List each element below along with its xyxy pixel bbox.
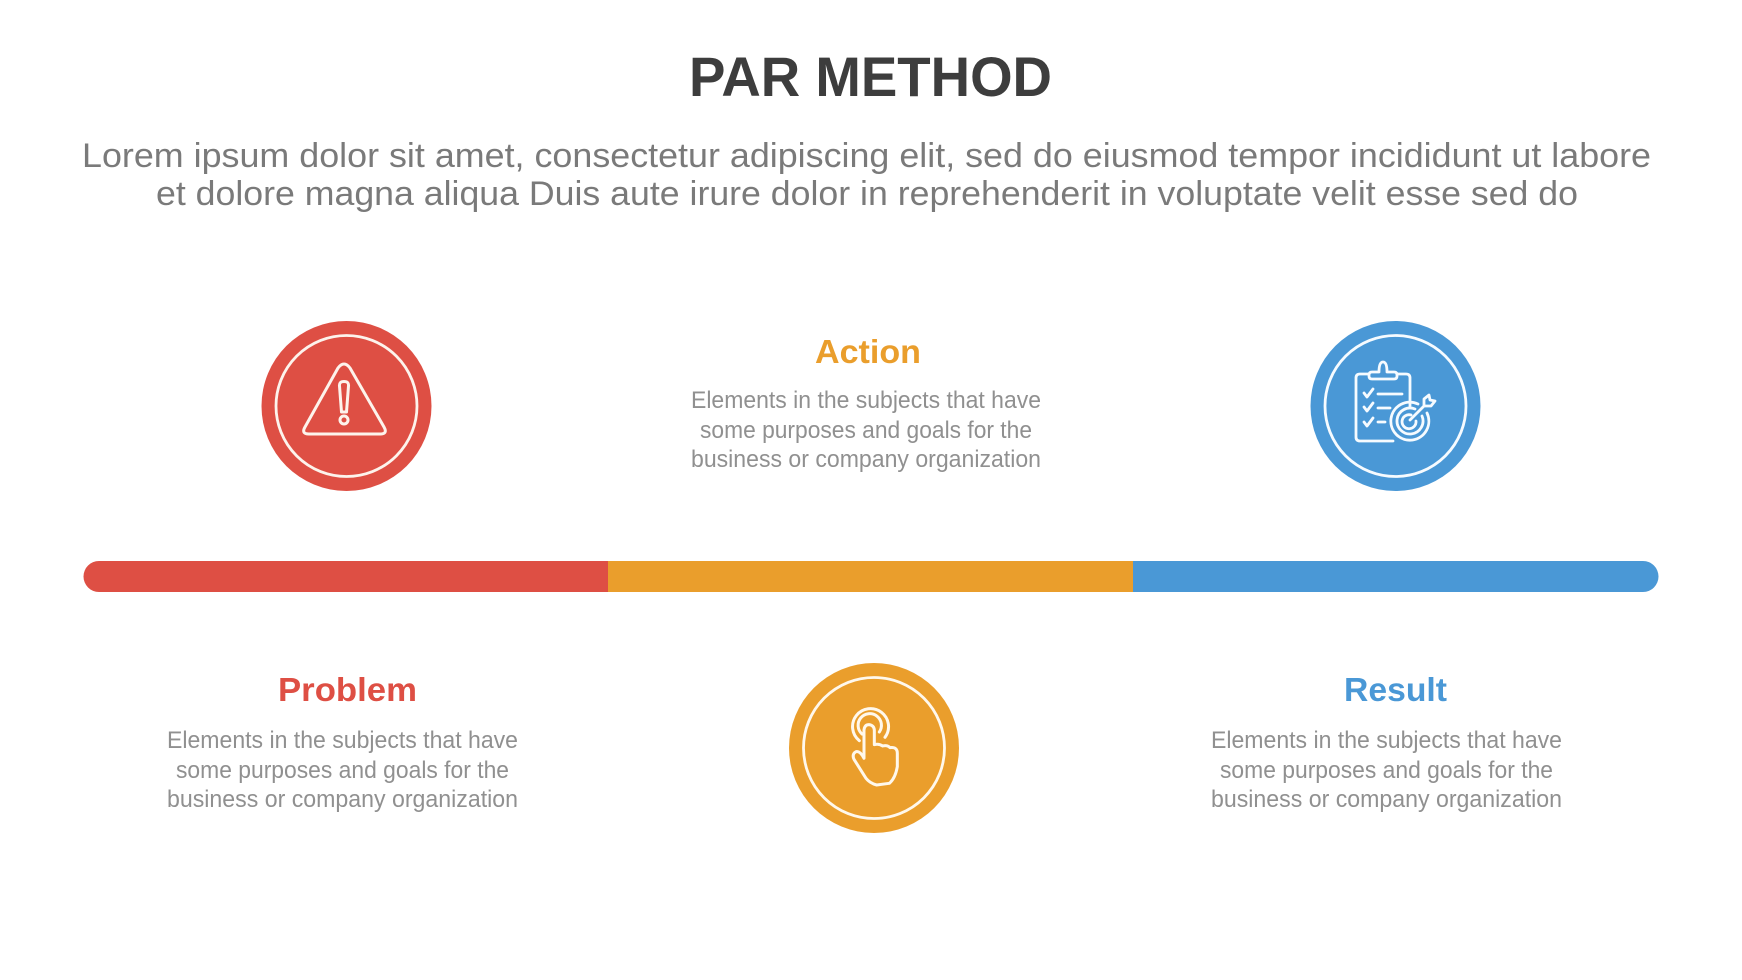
timeline bar: [83, 561, 1658, 592]
icon: tapping hand: [853, 709, 897, 785]
panel: problem text: some purposes and goals for the: [176, 757, 509, 784]
panel: result icon: [1310, 321, 1480, 491]
panel: action text: [691, 333, 1041, 473]
panel: action text: some purposes and goals for the: [700, 417, 1032, 444]
panel: action text: Elements in the subjects that have: [691, 387, 1041, 414]
panel: problem icon: [262, 321, 432, 491]
subtitle: Lorem ipsum dolor sit amet, consectetur adipiscing elit, sed do eiusmod tempor incididunt ut labore: [82, 137, 1651, 175]
panel: action text: Action: [815, 333, 921, 370]
panel: result text: business or company organization: [1211, 786, 1562, 813]
panel: result text: Elements in the subjects that have: [1211, 727, 1562, 754]
panel: problem text: Problem: [278, 671, 417, 708]
panel: problem text: [167, 671, 518, 813]
panel: result text: some purposes and goals for the: [1220, 757, 1553, 784]
subtitle: et dolore magna aliqua Duis aute irure dolor in reprehenderit in voluptate velit esse sed do: [156, 175, 1578, 213]
subtitle: [82, 137, 1651, 213]
panel: problem text: Elements in the subjects that have: [167, 727, 518, 754]
panel: action text: business or company organization: [691, 446, 1041, 473]
icon: clipboard and target: [1356, 362, 1435, 441]
icon: warning triangle: [304, 364, 385, 434]
panel: result text: Result: [1344, 671, 1447, 708]
panel: action icon: [789, 663, 959, 833]
panel: result text: [1211, 671, 1562, 813]
title: PAR METHOD: [689, 45, 1052, 108]
panel: problem text: business or company organization: [167, 786, 518, 813]
